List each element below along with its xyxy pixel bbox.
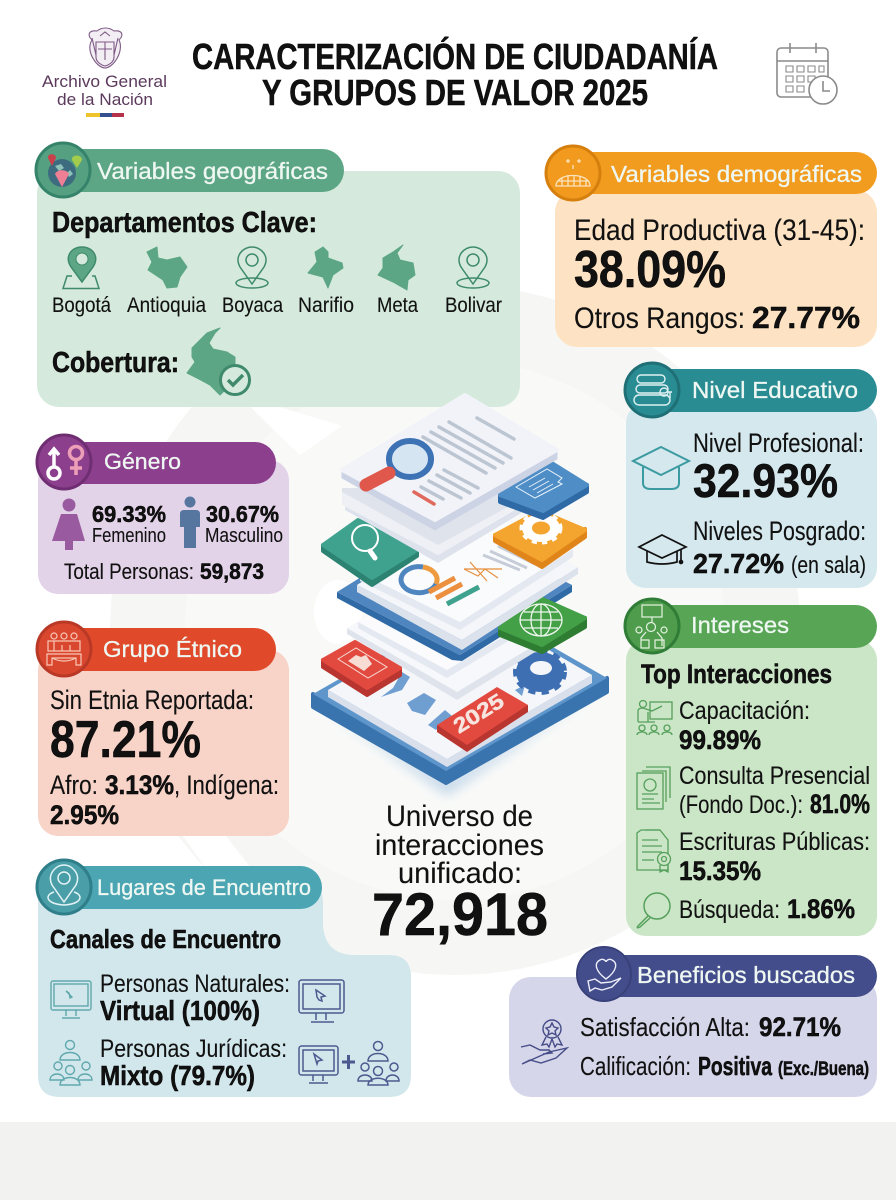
icon: pin Bogotá: [63, 247, 99, 288]
stat: otros rangos: [574, 300, 860, 335]
icon: mapa Antioquia: [147, 247, 187, 288]
icon: lupa: [366, 441, 431, 485]
icon: monitor teal: [51, 981, 91, 1018]
text: personas naturales: [100, 970, 290, 1026]
stat: afro e indígena: [50, 770, 279, 830]
icon: lupa búsqueda: [637, 893, 670, 928]
logo: Archivo General de la Nación: Archivo General: [42, 72, 167, 91]
icon: consulta presencial: [637, 767, 670, 809]
stat: calificación: (Exc./Buena): [778, 1059, 869, 1080]
stat: afro e indígena: 2.95%: [50, 800, 119, 830]
header: lugares de encuentro: Lugares de Encuentro: [97, 875, 311, 900]
chart: línea: [464, 562, 502, 581]
icon: pin Boyacá: [236, 247, 268, 288]
chart: dona: [401, 567, 436, 593]
stat: masculino: 30.67%: [206, 501, 279, 527]
stat: búsqueda: Búsqueda:: [679, 896, 780, 924]
text: personas naturales: Virtual (100%): [100, 995, 260, 1026]
sheets: pila intermedia: [347, 578, 535, 700]
stat: búsqueda: 1.86%: [787, 894, 855, 924]
tag: 2025: 2025: [449, 689, 509, 738]
stat: afro e indígena: 3.13%: [105, 770, 174, 800]
stat: consulta presencial: [679, 762, 870, 819]
icon: hombre: [180, 496, 200, 548]
header: beneficios buscados: [577, 947, 877, 1001]
stat: femenino: Femenino: [92, 525, 166, 547]
stat: universo de interacciones unificado: Universo de: [386, 800, 533, 833]
heading: departamentos clave: Departamentos Clave:: [52, 207, 317, 239]
header: género: Género: [104, 449, 181, 474]
icon: engranaje azul: [516, 652, 564, 692]
icon: mapa Nariño: [308, 247, 343, 288]
icon: escrituras públicas: [637, 830, 670, 872]
documento superior: [342, 395, 557, 530]
stat: niveles posgrado: [693, 516, 866, 579]
panel: grupo étnico: [37, 622, 289, 836]
stat: nivel profesional: 32.93%: [693, 454, 838, 507]
stat: consulta presencial: Consulta Presencial: [679, 762, 870, 790]
header: beneficios buscados: Beneficios buscados: [637, 962, 855, 988]
icon: mapa Meta: [378, 245, 415, 290]
panel: variables demográficas: [546, 146, 877, 347]
header: variables geográficas: Variables geográficas: [97, 158, 328, 184]
header: intereses: [625, 599, 877, 653]
header: nivel educativo: Nivel Educativo: [692, 377, 858, 403]
stat: calificación: Calificación:: [580, 1051, 691, 1081]
header: intereses: Intereses: [691, 612, 789, 638]
header: variables demográficas: Variables demográficas: [611, 161, 862, 187]
stat: universo de interacciones unificado: interacciones: [375, 829, 544, 862]
stat: afro e indígena: Afro:: [50, 770, 98, 800]
title: Y GRUPOS DE VALOR 2025: [262, 72, 648, 113]
stat: 38.09%: 38.09%: [574, 241, 726, 299]
stat: niveles posgrado: 27.72%: [693, 548, 784, 579]
stat: búsqueda: [679, 894, 855, 924]
stat: total personas: Total Personas:: [64, 559, 194, 584]
icon: mano con medalla: [521, 1020, 567, 1064]
icon: monitor navy: [299, 980, 344, 1022]
stat: calificación: Positiva: [698, 1051, 772, 1081]
stat: femenino: 69.33%: [92, 501, 166, 527]
logo: Archivo General de la Nación: de la Nación: [57, 90, 153, 109]
panel: beneficios buscados: [509, 947, 877, 1097]
stat: universo de interacciones unificado: 72,918: [372, 881, 548, 948]
panel: lugares de encuentro: [37, 860, 411, 1097]
panel: variables geográficas: [36, 143, 520, 407]
icon: monitor más personas: [299, 1042, 399, 1085]
text: personas jurídicas: Mixto (79.7%): [100, 1060, 255, 1091]
department labels: Boyaca: [222, 294, 283, 317]
header: variables demográficas: [546, 146, 877, 200]
stat: 87.21%: 87.21%: [50, 711, 201, 769]
text: personas jurídicas: [100, 1035, 287, 1091]
tag: 2025: [437, 687, 528, 752]
heading: canales de encuentro: Canales de Encuentro: [50, 924, 281, 954]
department labels: Narifio: [298, 294, 354, 317]
icon: calendar with clock: [777, 43, 837, 104]
stat: capacitación: Capacitación:: [679, 697, 810, 725]
title: CARACTERIZACIÓN DE CIUDADANÍA: [192, 35, 718, 77]
stat: total personas: 59,873: [200, 559, 264, 584]
icon: capacitación: [637, 700, 672, 735]
heading: top interacciones: Top Interacciones: [641, 659, 832, 689]
text: personas naturales: Personas Naturales:: [100, 970, 290, 998]
stat: escrituras públicas: 15.35%: [679, 856, 761, 886]
stat: capacitación: [679, 697, 810, 755]
líneas de texto: [421, 418, 514, 499]
tile: globo verde: [500, 598, 585, 652]
stat: satisfacción alta: Satisfacción Alta:: [580, 1012, 750, 1042]
text: personas jurídicas: Personas Jurídicas:: [100, 1035, 287, 1063]
logo: Archivo General de la Nación: [42, 28, 167, 117]
stat: universo de interacciones unificado: [372, 800, 548, 948]
icon: personas teal: [50, 1040, 92, 1085]
carpeta azul: [337, 522, 572, 661]
icon: national crest: [89, 28, 122, 68]
header: grupo étnico: [37, 622, 276, 676]
stat: masculino: Masculino: [205, 525, 283, 547]
panel: género: [37, 435, 289, 594]
header: variables geográficas: [36, 143, 344, 197]
tile: documento azul: [500, 462, 587, 518]
icon: birrete negro: [639, 535, 686, 564]
header: grupo étnico: Grupo Étnico: [103, 636, 242, 662]
title: [192, 35, 718, 113]
icon: mapa de Colombia con check: [187, 328, 250, 395]
department labels: Bolivar: [445, 294, 502, 317]
department labels: Antioquia: [127, 294, 206, 317]
icon: pin Bolívar: [457, 247, 489, 288]
stat: satisfacción alta: 92.71%: [759, 1012, 841, 1042]
stat: afro e indígena: , Indígena:: [174, 770, 279, 800]
stat: niveles posgrado: (en sala): [791, 552, 866, 579]
header: lugares de encuentro: [37, 860, 322, 914]
stat: capacitación: 99.89%: [679, 725, 761, 755]
stat: calificación: [580, 1051, 869, 1081]
label: cobertura: Cobertura:: [52, 347, 179, 379]
department labels: [52, 294, 502, 317]
icon: birrete teal: [633, 447, 689, 489]
map sheet: [328, 606, 592, 767]
header: género: [37, 435, 276, 489]
chart: barras: [429, 578, 479, 604]
tile: perfil rojo: [323, 642, 400, 695]
tile: lupa verde azulado: [323, 520, 417, 585]
stat: femenino: [92, 501, 166, 547]
header: nivel educativo: [625, 363, 877, 417]
stat: universo de interacciones unificado: unificado:: [398, 857, 522, 890]
stat: masculino: [205, 501, 283, 547]
stat: consulta presencial: (Fondo Doc.):: [679, 791, 803, 819]
department labels: Bogotá: [52, 294, 111, 317]
stat: otros rangos: 27.77%: [752, 300, 860, 335]
panel: nivel educativo: [625, 363, 877, 588]
department labels: Meta: [377, 294, 418, 317]
panel: intereses: [625, 599, 877, 936]
tile: engranaje naranja: [495, 511, 585, 567]
stat: consulta presencial: 81.0%: [810, 789, 870, 819]
text: sin etnia reportada: Sin Etnia Reportada:: [50, 685, 254, 715]
icon: mujer: [52, 498, 85, 550]
sheets: gráficos: [357, 497, 578, 650]
base: bandeja azul: [313, 602, 607, 783]
stat: escrituras públicas: Escrituras Públicas:: [679, 828, 870, 856]
illustration: pila isométrica de documentos: [313, 395, 607, 795]
stat: nivel profesional: [693, 428, 864, 507]
stat: otros rangos: Otros Rangos:: [574, 302, 745, 335]
sheets: pila superior: [342, 485, 530, 563]
stat: escrituras públicas: [679, 828, 870, 886]
